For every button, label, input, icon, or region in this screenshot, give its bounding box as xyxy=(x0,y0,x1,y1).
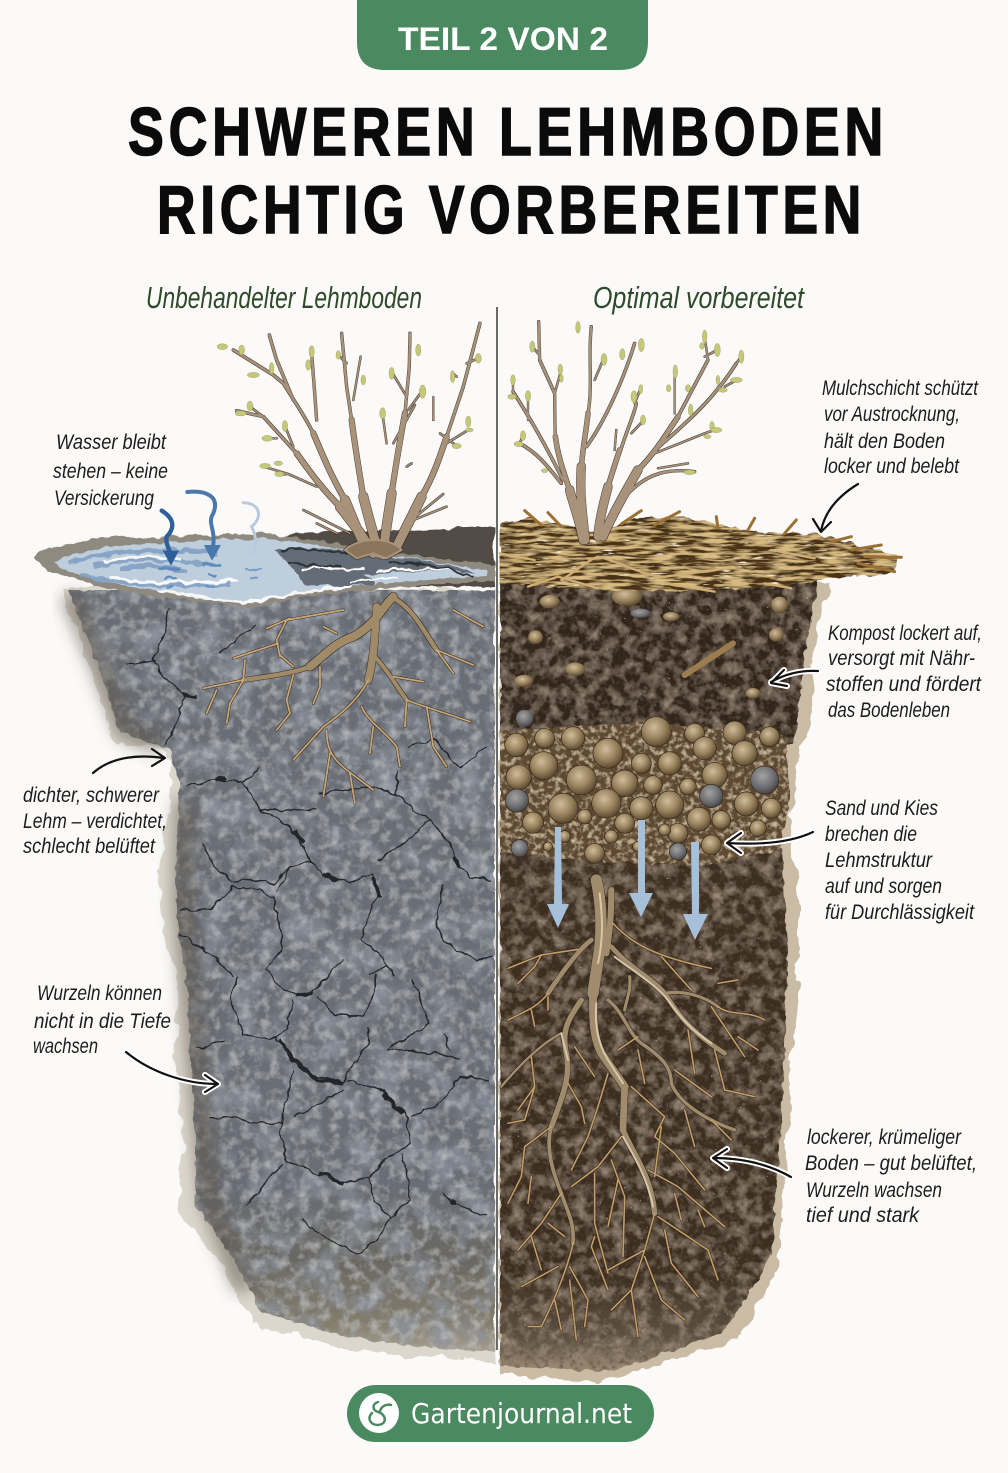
water puddle xyxy=(33,527,494,607)
buds xyxy=(217,321,744,477)
panel: untreated clay soil xyxy=(62,585,495,1362)
cracks xyxy=(127,607,493,977)
footer brand pill: Gartenjournal.net xyxy=(411,1397,632,1430)
label: mulch: vor Austrocknung, xyxy=(824,403,960,426)
divider xyxy=(496,307,498,1350)
heading: untreated soil: Unbehandelter Lehmboden xyxy=(146,280,422,315)
label: roots blocked: wachsen xyxy=(33,1035,98,1058)
label: compost xyxy=(826,622,982,722)
label: roots blocked: Wurzeln können xyxy=(37,982,162,1005)
roots: shallow left xyxy=(203,597,483,803)
label: crumbly soil: Wurzeln wachsen xyxy=(806,1179,942,1202)
layer: compost xyxy=(500,580,818,745)
label: mulch xyxy=(822,377,979,478)
part badge xyxy=(357,0,648,70)
soil ridge behind water xyxy=(277,527,494,587)
title xyxy=(128,94,888,248)
label: sand and gravel: Sand und Kies xyxy=(825,797,938,820)
label: compost: versorgt mit Nähr- xyxy=(828,647,975,670)
lower cracks xyxy=(197,960,490,1253)
label: compost: stoffen und fördert xyxy=(826,673,982,696)
label: water stays: stehen – keine xyxy=(53,460,168,483)
label: roots blocked xyxy=(33,982,171,1058)
heading: prepared soil: Optimal vorbereitet xyxy=(593,280,805,315)
label: mulch: hält den Boden xyxy=(824,430,945,453)
label: crumbly soil xyxy=(805,1126,977,1227)
layer: sand and gravel xyxy=(500,717,790,866)
callout arrows xyxy=(93,484,858,1177)
label: crumbly soil: tief und stark xyxy=(806,1204,920,1227)
label: mulch: locker und belebt xyxy=(824,455,960,478)
label: sand and gravel xyxy=(825,797,975,924)
label: dense clay: Lehm – verdichtet, xyxy=(23,810,167,833)
panel: prepared soil xyxy=(499,580,828,1382)
compost stones and stick xyxy=(514,587,788,727)
label: dense clay: schlecht belüftet xyxy=(23,835,156,858)
roots: deep right xyxy=(501,880,765,1340)
label: crumbly soil: Boden – gut belüftet, xyxy=(805,1152,977,1175)
tree: right xyxy=(513,322,741,540)
label: sand and gravel: brechen die xyxy=(825,823,917,846)
label: compost: das Bodenleben xyxy=(828,699,950,722)
mulch layer xyxy=(500,511,901,592)
label: crumbly soil: lockerer, krümeliger xyxy=(807,1126,962,1149)
footer brand pill xyxy=(347,1385,654,1442)
label: water stays: Wasser bleibt xyxy=(56,431,167,454)
part badge: TEIL 2 VON 2 xyxy=(398,21,608,57)
layer: lower crumbly soil xyxy=(500,848,788,1372)
label: roots blocked: nicht in die Tiefe xyxy=(34,1010,171,1033)
icon: brand logo xyxy=(359,1393,399,1433)
label: sand and gravel: Lehmstruktur xyxy=(825,849,933,872)
label: water stays xyxy=(53,431,168,510)
label: sand and gravel: auf und sorgen xyxy=(825,875,942,898)
label: dense clay xyxy=(23,784,167,858)
tree: left xyxy=(233,323,480,558)
water arrows: seepage blocked xyxy=(162,492,259,566)
label: dense clay: dichter, schwerer xyxy=(23,784,160,807)
label: water stays: Versickerung xyxy=(54,487,154,510)
label: sand and gravel: für Durchlässigkeit xyxy=(825,901,975,924)
soil rim xyxy=(499,582,828,1382)
arrows: water draining xyxy=(547,820,708,940)
